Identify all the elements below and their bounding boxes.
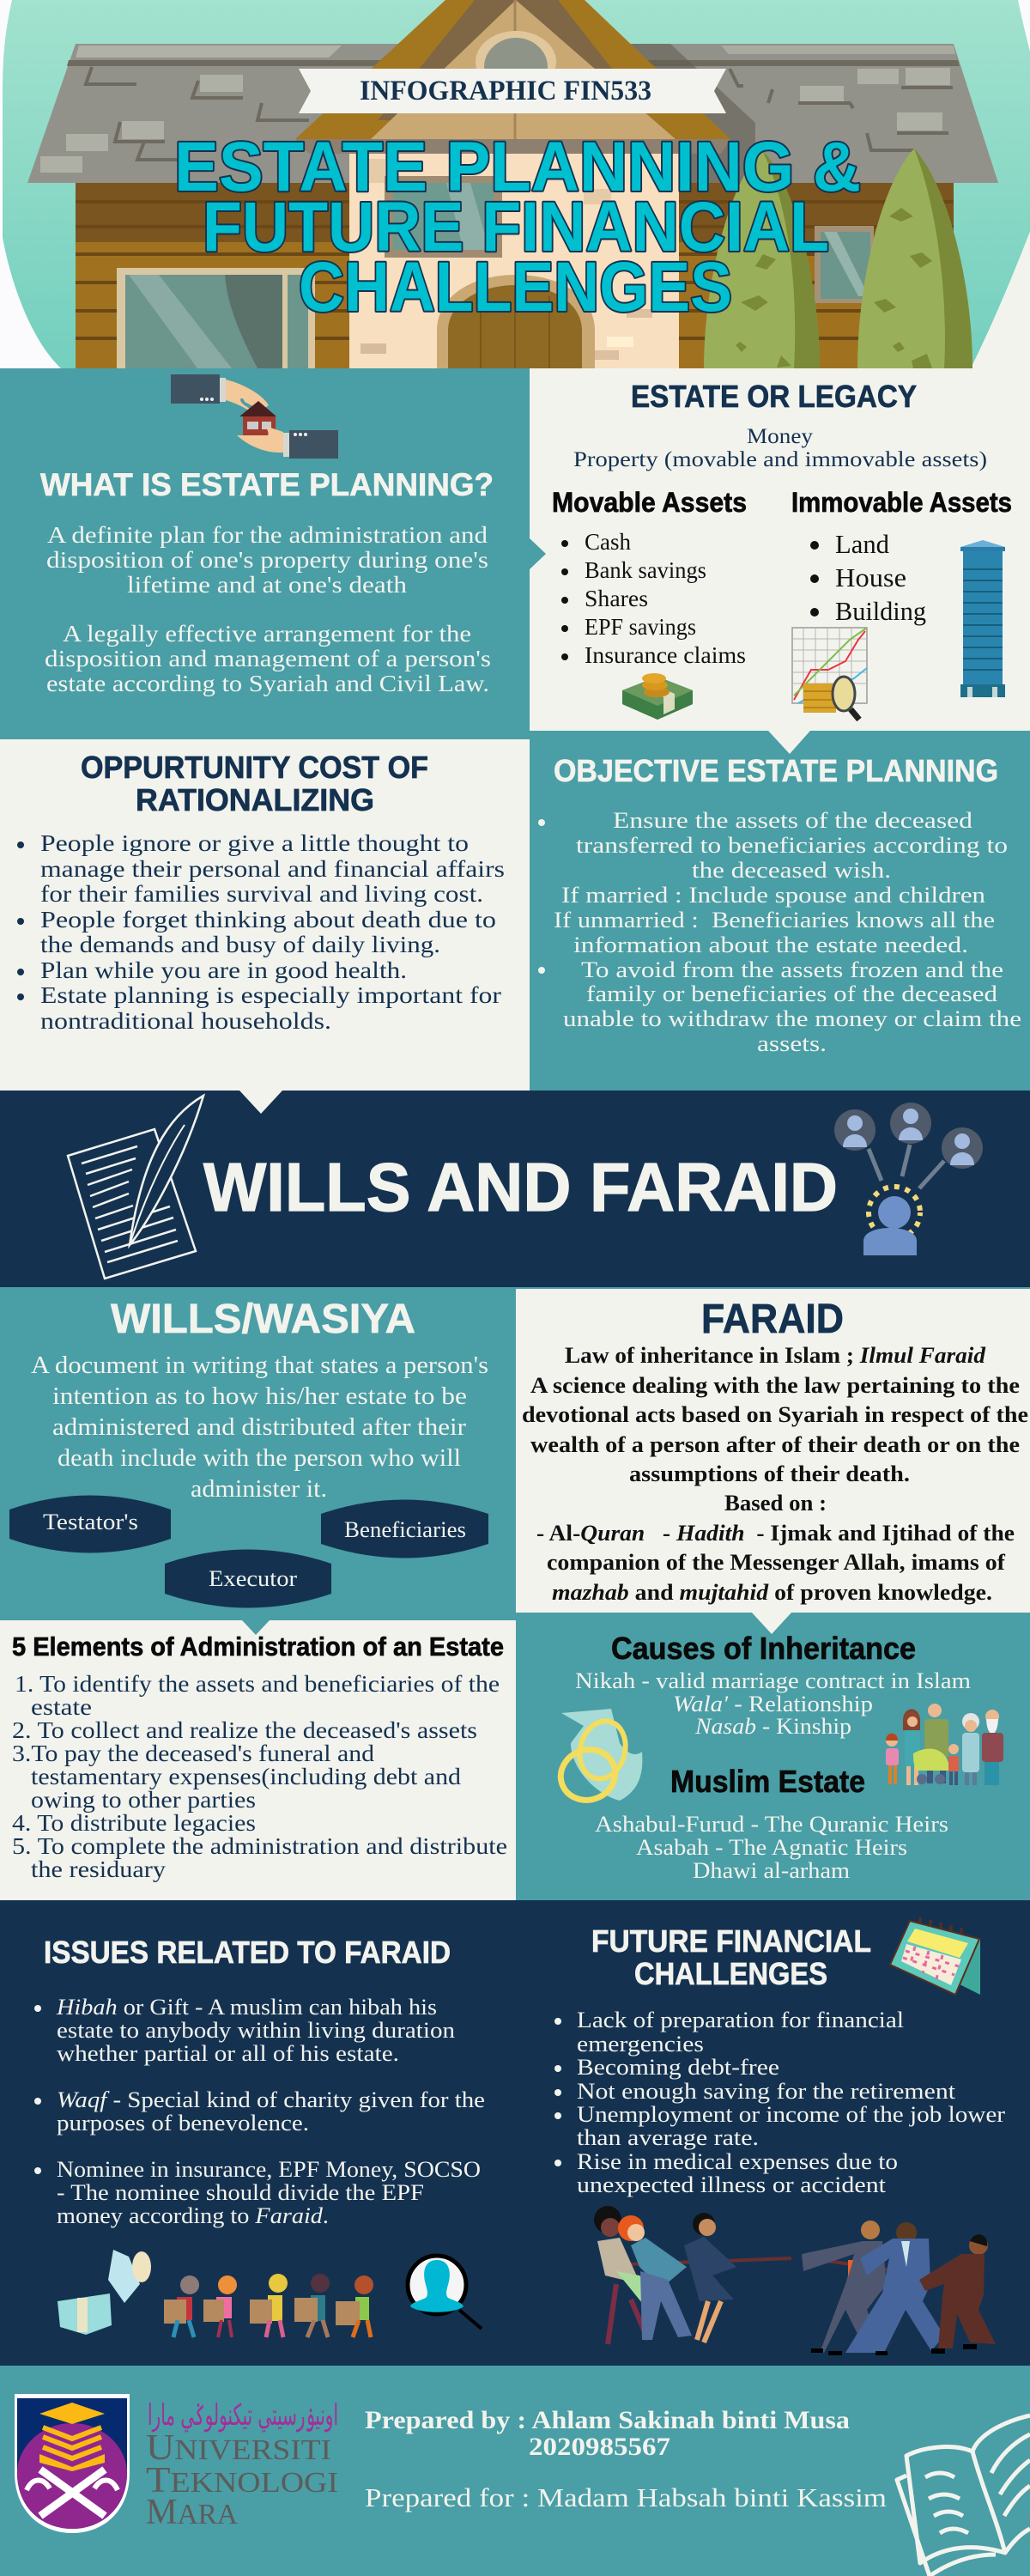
text block: information about the estate needed.	[573, 932, 968, 957]
label: beneficiaries	[321, 1499, 488, 1558]
mint backdrop	[3, 0, 1030, 368]
text block	[538, 807, 1021, 1056]
text block: assets.	[757, 1030, 827, 1056]
logo wordmark: latin: UNIVERSITI	[146, 2428, 331, 2468]
text block: heirs: Dhawi al-arham	[693, 1858, 850, 1883]
list: immovable assets: Building	[835, 596, 926, 626]
sub-heading: movable: Movable Assets	[552, 487, 747, 518]
heading: RATIONALIZING	[136, 782, 374, 817]
heading: WILLS/WASIYA	[111, 1297, 415, 1342]
illustration: house	[27, 0, 998, 368]
bullet list: Hibah or Gift - A muslim can hibah his	[56, 1995, 437, 2020]
icon: magnifier profile	[408, 2256, 482, 2329]
woman 1	[594, 2206, 661, 2344]
panel: opportunity cost	[0, 739, 530, 1091]
text block: mazhab and mujtahid of proven knowledge.	[552, 1580, 992, 1605]
rope	[631, 2258, 939, 2277]
heading: WILLS AND FARAID	[203, 1149, 838, 1225]
woman 3	[684, 2213, 736, 2342]
bullet list: Unemployment or income of the job lower	[577, 2102, 1005, 2127]
heading	[81, 750, 428, 817]
text block: administered and distributed after their	[52, 1414, 467, 1441]
door	[437, 275, 595, 368]
shoes	[811, 2344, 977, 2355]
numbered list: estate	[31, 1694, 92, 1720]
text block: heirs	[595, 1812, 948, 1883]
text block: causes	[575, 1668, 971, 1739]
text block: estate according to Syariah and Civil Law.	[46, 670, 489, 696]
text block: lifetime and at one's death	[127, 571, 407, 598]
text block: Ensure the assets of the deceased	[613, 807, 972, 833]
text block: If married : Include spouse and children	[561, 882, 985, 908]
arrow	[242, 1620, 270, 1635]
text block: To avoid from the assets frozen and the	[581, 957, 1003, 982]
label: executor: Executor	[209, 1565, 297, 1591]
numbered list: 1. To identify the assets and beneficiaries of the	[15, 1671, 500, 1697]
credits	[365, 2406, 887, 2512]
arrow	[752, 1613, 791, 1634]
heading: FARAID	[701, 1297, 844, 1342]
icon: open book	[897, 2415, 1030, 2576]
ribbon banner	[299, 69, 726, 113]
text block: A definite plan for the administration and	[47, 521, 488, 548]
panel: objective estate planning	[530, 731, 1030, 1091]
bullet list: unexpected illness or accident	[577, 2172, 887, 2197]
text block: companion of the Messenger Allah, imams of	[547, 1550, 1005, 1575]
text block	[573, 425, 987, 471]
text block: devotional acts based on Syariah in respect of the	[522, 1402, 1028, 1427]
logo wordmark: arabic: اونيۏرسيتي تيكنولوݢي مارا	[148, 2398, 338, 2433]
text block: heirs: Asabah - The Agnatic Heirs	[636, 1835, 907, 1860]
icon: tower building	[960, 540, 1005, 697]
trees	[704, 150, 820, 368]
icon: gift box	[58, 2250, 151, 2335]
bullet list: People ignore or give a little thought to	[40, 830, 469, 856]
man 2	[845, 2222, 944, 2353]
heading: Causes of Inheritance	[611, 1631, 916, 1666]
sub-heading: immovable: Immovable Assets	[791, 487, 1012, 518]
text block: - Al-Quran - Hadith - Ijmak and Ijtihad of the	[536, 1521, 1015, 1546]
text block: the deceased wish.	[692, 857, 891, 883]
panel: faraid	[516, 1287, 1030, 1900]
numbered list: the residuary	[31, 1856, 167, 1882]
list: movable assets: Bank savings	[585, 557, 706, 583]
heading: ESTATE OR LEGACY	[631, 379, 917, 414]
label: executor	[165, 1549, 331, 1607]
heading: FUTURE FINANCIAL	[591, 1923, 871, 1959]
logo: university shield	[15, 2394, 130, 2533]
numbered list: 2. To collect and realize the deceased's assets	[12, 1717, 477, 1743]
text block: wealth of a person after of their death or on the	[530, 1432, 1020, 1457]
numbered list: 5. To complete the administration and distribute	[12, 1833, 507, 1859]
bullet list: money according to Faraid.	[57, 2203, 329, 2228]
list: immovable assets: House	[835, 562, 906, 592]
text block: Based on :	[724, 1491, 827, 1516]
icon: children with bags	[164, 2274, 373, 2337]
bullet list: for their families survival and living cost.	[40, 881, 483, 907]
title: FUTURE FINANCIAL	[203, 188, 829, 266]
text block: causes: Nasab - Kinship	[694, 1714, 851, 1739]
credits: Prepared for : Madam Habsah binti Kassim	[365, 2482, 887, 2512]
icon: calendar	[890, 1917, 980, 1995]
bullet list	[554, 2008, 1005, 2197]
text block	[45, 521, 491, 696]
numbered list: owing to other parties	[31, 1787, 256, 1813]
logo wordmark: latin: TEKNOLOGI	[146, 2461, 338, 2500]
panel: wills/wasiya	[0, 1287, 516, 1620]
panel: future financial challenges	[554, 1917, 1005, 2355]
icon: hands passing a house	[171, 374, 338, 459]
bullet list: purposes of benevolence.	[57, 2111, 309, 2136]
arrow	[239, 1091, 282, 1114]
heading: 5 Elements of Administration of an Estate	[12, 1631, 504, 1662]
text block: A science dealing with the law pertaining to the	[530, 1373, 1020, 1398]
credits: 2020985567	[529, 2433, 670, 2461]
text block: disposition of one's property during one's	[46, 546, 488, 573]
text block: causes: Wala' - Relationship	[673, 1692, 873, 1716]
text block: heirs: Ashabul-Furud - The Quranic Heirs	[595, 1812, 948, 1837]
list: movable assets: Shares	[585, 586, 648, 611]
center window	[385, 176, 502, 258]
text block: Money	[747, 425, 814, 448]
title: CHALLENGES	[299, 248, 732, 326]
panel: what is estate planning	[0, 368, 530, 739]
icon: chart with magnifier	[792, 628, 867, 720]
text block: A document in writing that states a person's	[31, 1352, 488, 1379]
icon: document and quill	[68, 1096, 203, 1279]
label: testator	[9, 1496, 171, 1552]
bullet list: People forget thinking about death due to	[40, 907, 496, 933]
credits: Prepared by : Ahlam Sakinah binti Musa	[365, 2406, 850, 2434]
text block: A legally effective arrangement for the	[63, 620, 471, 647]
text block: If unmarried : Beneficiaries knows all the	[554, 907, 995, 933]
bullet list: Nominee in insurance, EPF Money, SOCSO	[57, 2157, 481, 2182]
logo wordmark: latin: MARA	[146, 2493, 238, 2532]
text block: Property (movable and immovable assets)	[573, 448, 987, 471]
icon: people network	[834, 1103, 983, 1255]
illustration: tug of war	[594, 2206, 996, 2355]
list: movable assets	[561, 529, 746, 668]
list: immovable assets	[810, 529, 926, 626]
hero header	[3, 0, 1030, 368]
numbered list: testamentary expenses(including debt and	[31, 1764, 462, 1789]
bullet list	[17, 830, 505, 1034]
list: movable assets: Insurance claims	[585, 642, 746, 668]
bullet list: estate to anybody within living duration	[57, 2018, 455, 2043]
bullet list: the demands and busy of daily living.	[40, 932, 440, 957]
text block: Law of inheritance in Islam ; Ilmul Faraid	[565, 1343, 986, 1368]
bullet list: Becoming debt-free	[577, 2055, 779, 2080]
arrow	[768, 731, 810, 754]
heading: ISSUES RELATED TO FARAID	[44, 1935, 451, 1970]
man 3	[919, 2234, 996, 2348]
bullet list: Waqf - Special kind of charity given for the	[57, 2087, 485, 2112]
list: immovable assets: Land	[835, 529, 889, 559]
bullet list: Lack of preparation for financial	[577, 2008, 904, 2032]
heading: muslim estate: Muslim Estate	[670, 1764, 865, 1799]
bullet list: nontraditional households.	[40, 1008, 331, 1034]
bullet list: Rise in medical expenses due to	[577, 2149, 898, 2174]
man 1	[802, 2221, 887, 2353]
bullet list: whether partial or all of his estate.	[57, 2041, 399, 2066]
label: beneficiaries: Beneficiaries	[344, 1516, 466, 1542]
list: movable assets: Cash	[585, 529, 632, 555]
arrow	[530, 538, 546, 569]
banner label: INFOGRAPHIC FIN533	[360, 76, 651, 106]
icon: family	[886, 1704, 1003, 1785]
numbered list: 3.To pay the deceased's funeral and	[12, 1741, 375, 1766]
label: testator: Testator's	[43, 1509, 138, 1534]
text block: disposition and management of a person's	[45, 645, 491, 671]
text block: unable to withdraw the money or claim the	[563, 1005, 1021, 1031]
bullet list: than average rate.	[577, 2125, 759, 2150]
bullet list	[34, 1995, 485, 2228]
heading: OBJECTIVE ESTATE PLANNING	[554, 753, 998, 788]
text block: transferred to beneficiaries according to	[576, 832, 1008, 858]
numbered list: 4. To distribute legacies	[12, 1810, 256, 1836]
footer	[0, 2366, 1030, 2576]
panel: 5 elements of administration	[0, 1620, 516, 1900]
title: ESTATE PLANNING &	[174, 128, 861, 206]
bullet list: - The nominee should divide the EPF	[57, 2180, 424, 2205]
bullet list: Estate planning is especially important for	[40, 982, 501, 1008]
left large window	[117, 268, 315, 368]
heading	[591, 1923, 871, 1991]
panel: estate or legacy	[530, 368, 1030, 731]
text block: assumptions of their death.	[629, 1461, 910, 1486]
icon: wedding rings	[554, 1709, 642, 1807]
heading: OPPURTUNITY COST OF	[81, 750, 428, 785]
text block: death include with the person who will	[58, 1445, 461, 1472]
bullet list: Plan while you are in good health.	[40, 957, 407, 983]
heading: WHAT IS ESTATE PLANNING?	[40, 467, 494, 502]
bullet list: emergencies	[577, 2032, 704, 2057]
list: movable assets: EPF savings	[585, 614, 696, 640]
bullet list: manage their personal and financial affairs	[40, 856, 505, 882]
text block: intention as to how his/her estate to be	[52, 1383, 467, 1410]
text block	[31, 1352, 488, 1503]
icon: money stack	[622, 673, 693, 720]
right window	[815, 226, 874, 303]
text block: family or beneficiaries of the deceased	[586, 981, 997, 1006]
woman 2	[618, 2215, 692, 2340]
text block: administer it.	[191, 1476, 327, 1503]
heading: CHALLENGES	[634, 1956, 827, 1991]
panel: issues related to faraid	[0, 1900, 1030, 2366]
numbered list	[12, 1671, 507, 1882]
title	[174, 128, 861, 326]
bullet list: Not enough saving for the retirement	[577, 2079, 956, 2104]
band: wills and faraid	[0, 1091, 1030, 1287]
panel: causes of inheritance	[554, 1631, 1003, 1883]
text block: causes: Nikah - valid marriage contract in Islam	[575, 1668, 971, 1693]
text block	[522, 1343, 1028, 1605]
logo wordmark: latin	[146, 2428, 338, 2532]
